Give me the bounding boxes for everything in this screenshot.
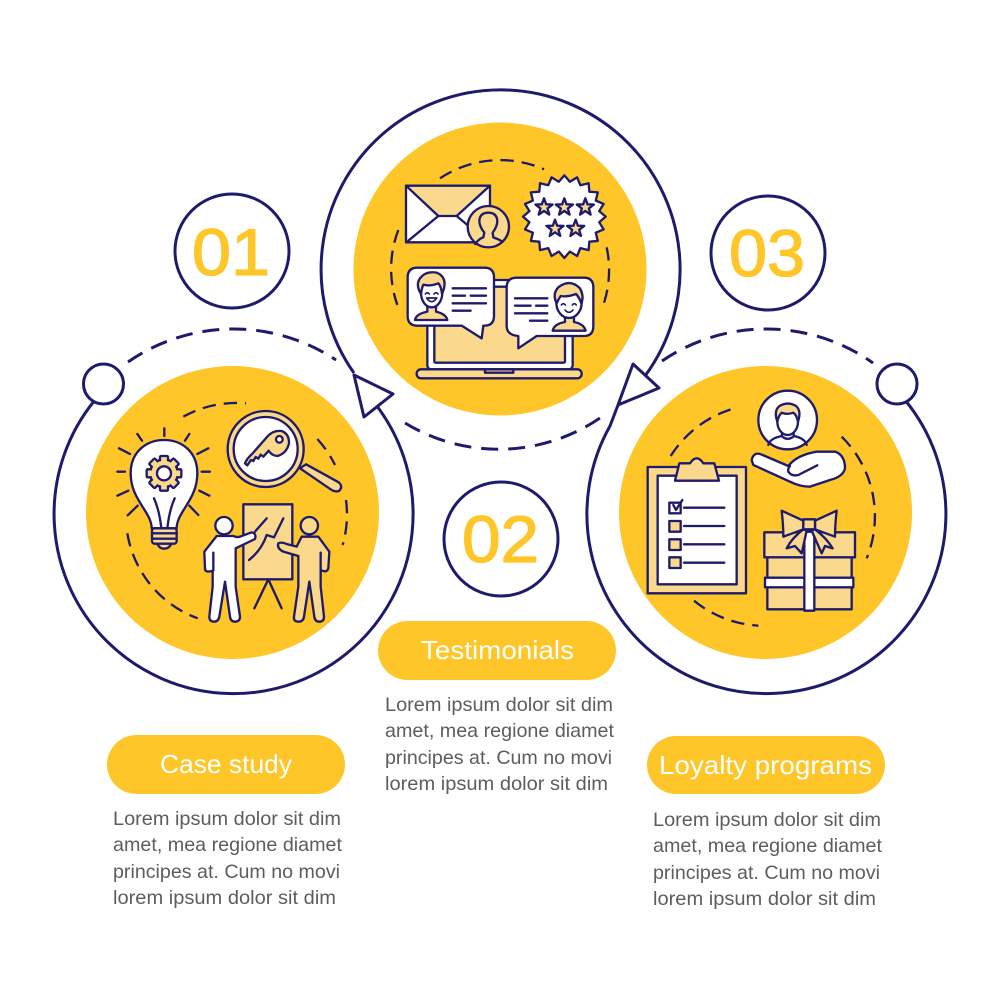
icon: star rating seal xyxy=(523,175,606,258)
pill label: loyalty programs: Loyalty programs xyxy=(659,750,872,780)
pill label: loyalty programs xyxy=(647,736,885,794)
number 02: 02 xyxy=(462,502,539,576)
icon: light bulb with gear xyxy=(117,428,210,549)
icon group: testimonials xyxy=(391,160,609,378)
ring: loyalty programs outline xyxy=(587,400,946,694)
text block: loyalty programs description: lorem ipsum dolor sit dim xyxy=(653,888,876,910)
icon: right speech bubble xyxy=(507,278,593,348)
ring: case study outline xyxy=(54,400,413,694)
pill label: testimonials xyxy=(378,621,616,680)
arrow: right triangle xyxy=(618,364,659,405)
dashed arc: loyalty programs top xyxy=(662,329,873,363)
icon: presenter person xyxy=(204,517,255,622)
number 01 xyxy=(175,194,289,308)
text block: testimonials description: principes at. Cum no movi xyxy=(385,747,612,769)
icon: laptop xyxy=(417,280,582,378)
text block: testimonials description: amet, mea regione diamet xyxy=(385,720,615,742)
pill label: case study xyxy=(107,735,345,794)
inner dashed circle xyxy=(391,160,609,305)
panel: yellow disc testimonials xyxy=(354,122,646,416)
dashed arc: case study top xyxy=(128,329,336,362)
text block: loyalty programs description: principes at. Cum no movi xyxy=(653,862,880,884)
ring: testimonials outline xyxy=(321,90,680,376)
number 02 xyxy=(444,482,558,596)
text block: case study description: amet, mea regione diamet xyxy=(113,834,343,856)
text block: loyalty programs description xyxy=(653,809,883,910)
icon: envelope xyxy=(406,186,509,247)
pill label: testimonials: Testimonials xyxy=(421,635,574,665)
text block: loyalty programs description: amet, mea regione diamet xyxy=(653,835,883,857)
icon: clipboard checklist xyxy=(648,458,746,593)
panel: yellow disc case study xyxy=(86,366,379,659)
icon: gift box xyxy=(764,511,855,611)
pill label: case study: Case study xyxy=(160,749,292,779)
text block: case study description xyxy=(113,808,343,909)
arrow: left triangle xyxy=(354,375,393,417)
text block: testimonials description: Lorem ipsum dolor sit dim xyxy=(385,694,613,716)
icon: left speech bubble xyxy=(408,268,494,338)
icon: presentation board xyxy=(243,504,292,608)
icon group: loyalty programs xyxy=(648,391,875,626)
number 03 xyxy=(711,196,825,310)
panel: yellow disc loyalty programs xyxy=(619,366,912,659)
node circle right xyxy=(877,364,917,404)
text block: case study description: Lorem ipsum dolor sit dim xyxy=(113,808,341,830)
text block: case study description: lorem ipsum dolor sit dim xyxy=(113,887,336,909)
icon: customer avatar xyxy=(758,391,817,449)
text block: testimonials description xyxy=(385,694,615,795)
icon: second person xyxy=(278,517,329,622)
text block: case study description: principes at. Cum no movi xyxy=(113,861,340,883)
number 03: 03 xyxy=(729,216,805,290)
inner dashed circle xyxy=(127,403,347,618)
number 01: 01 xyxy=(192,215,270,289)
text block: testimonials description: lorem ipsum dolor sit dim xyxy=(385,773,608,795)
icon: magnifier with key xyxy=(228,411,341,491)
inner dashed circle xyxy=(671,408,875,626)
icon: open hand xyxy=(752,452,845,487)
icon group: case study xyxy=(117,403,347,622)
text block: loyalty programs description: Lorem ipsum dolor sit dim xyxy=(653,809,881,831)
dashed arc: testimonials bottom xyxy=(405,413,607,449)
node circle left xyxy=(84,364,124,404)
